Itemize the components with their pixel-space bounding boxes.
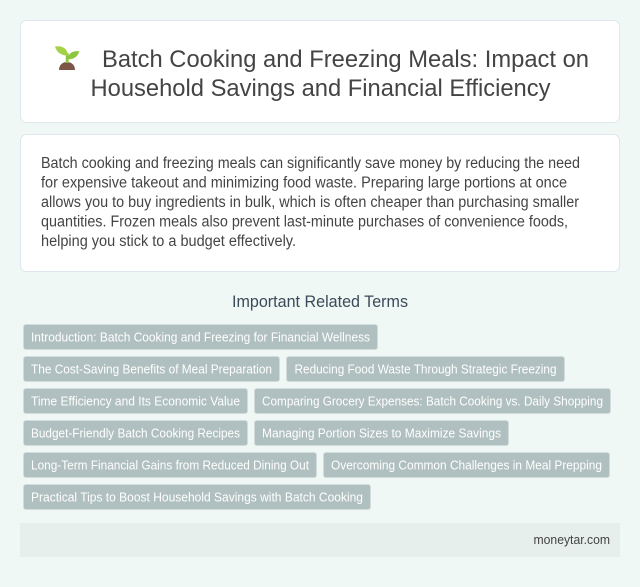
tag: reducing food waste bbox=[286, 356, 564, 382]
tag list: related terms bbox=[24, 324, 610, 510]
summary text: quantities. Frozen meals also prevent last-minute purchases of convenience foods, bbox=[41, 214, 568, 230]
tag: grocery expenses bbox=[254, 388, 610, 414]
tag: time efficiency: Time Efficiency and Its Economic Value bbox=[31, 394, 240, 408]
tag: overcoming challenges: Overcoming Common Challenges in Meal Prepping bbox=[331, 458, 602, 472]
summary text: Batch cooking and freezing meals can significantly save money by reducing the need bbox=[41, 155, 580, 172]
footer bbox=[20, 523, 620, 557]
summary text bbox=[41, 155, 580, 250]
title: Household Savings and Financial Efficiency bbox=[90, 75, 550, 102]
tag: long-term gains bbox=[24, 452, 316, 478]
title bbox=[90, 46, 589, 102]
tag: portion sizes: Managing Portion Sizes to Maximize Savings bbox=[262, 426, 501, 440]
tag: grocery expenses: Comparing Grocery Expenses: Batch Cooking vs. Daily Shopping bbox=[262, 394, 603, 408]
tag: time efficiency bbox=[24, 388, 248, 414]
footer source text: moneytar.com bbox=[534, 533, 610, 547]
tag: portion sizes bbox=[254, 420, 508, 446]
tag: introduction bbox=[24, 324, 378, 350]
tag: practical tips bbox=[24, 484, 370, 510]
tag: reducing food waste: Reducing Food Waste Through Strategic Freezing bbox=[294, 362, 556, 376]
tag: practical tips: Practical Tips to Boost Household Savings with Batch Cooking bbox=[31, 490, 363, 504]
summary text: helping you stick to a budget effectively. bbox=[41, 233, 296, 250]
tag: cost-saving benefits bbox=[24, 356, 280, 382]
heading: related terms: Important Related Terms bbox=[232, 293, 408, 311]
tag: cost-saving benefits: The Cost-Saving Benefits of Meal Preparation bbox=[31, 362, 272, 376]
tag: overcoming challenges bbox=[324, 452, 610, 478]
summary text: for expensive takeout and minimizing food waste. Preparing large portions at once bbox=[41, 174, 567, 192]
tag: budget recipes: Budget-Friendly Batch Cooking Recipes bbox=[31, 426, 240, 440]
icon: seedling bbox=[55, 46, 79, 70]
tag: long-term gains: Long-Term Financial Gains from Reduced Dining Out bbox=[31, 458, 309, 472]
tag: budget recipes bbox=[24, 420, 248, 446]
panel: summary card bbox=[20, 134, 620, 272]
title: Batch Cooking and Freezing Meals: Impact on bbox=[102, 46, 589, 73]
panel: title card bbox=[20, 20, 620, 122]
tag: introduction: Introduction: Batch Cooking and Freezing for Financial Wellness bbox=[31, 330, 370, 344]
summary text: allows you to buy ingredients in bulk, which is often cheaper than purchasing smaller bbox=[41, 194, 579, 211]
